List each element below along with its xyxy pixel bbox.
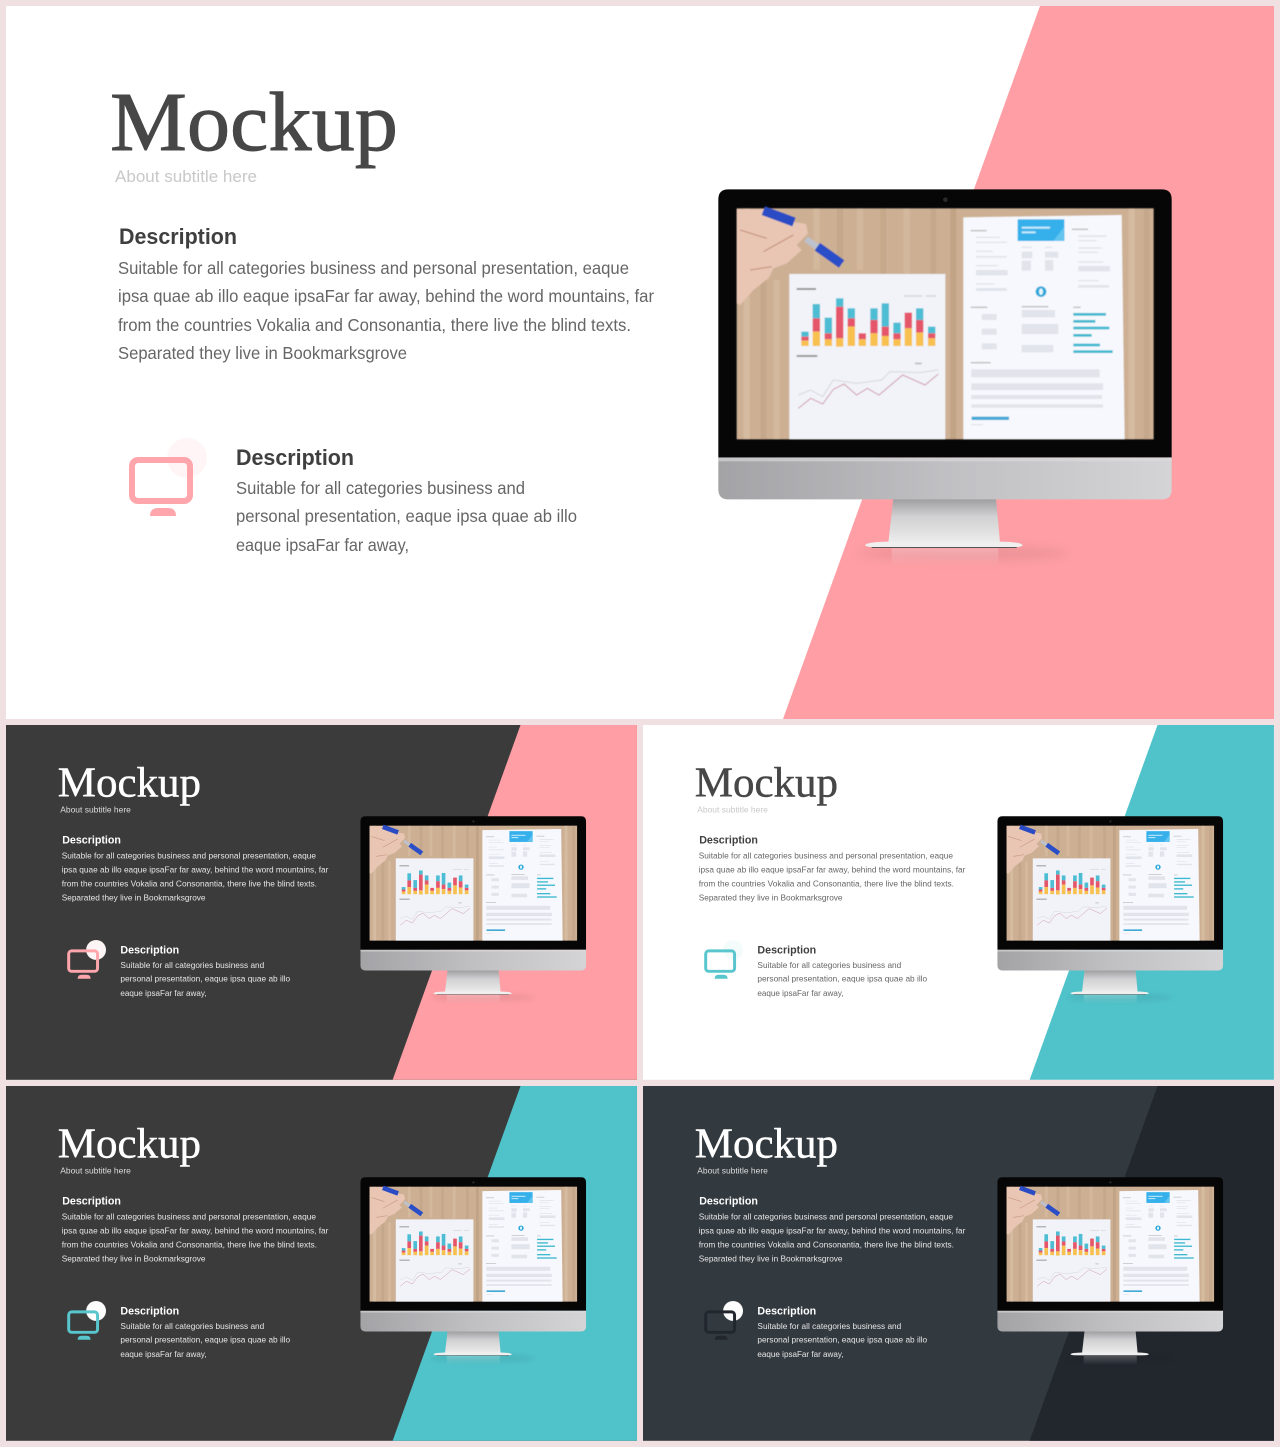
text block: description — [118, 224, 654, 363]
text block: feature description: Suitable for all categories business and — [757, 1321, 901, 1331]
icon: monitor — [69, 940, 106, 979]
monitor mockup — [360, 816, 586, 1004]
text block: description: ipsa quae ab illo eaque ipsaFar far away, behind the word mountains, far — [699, 864, 966, 874]
subtitle: About subtitle here — [697, 805, 768, 815]
monitor mockup — [997, 816, 1223, 1004]
text block: description: Description — [62, 834, 121, 846]
text block: description — [62, 1195, 329, 1264]
text block: description: Suitable for all categories business and personal presentation, eaque — [62, 850, 316, 860]
text block: description: ipsa quae ab illo eaque ipsaFar far away, behind the word mountains, far — [62, 1225, 329, 1235]
panel: dark and teal slide — [6, 1086, 637, 1441]
text block: feature description: Description — [120, 944, 179, 956]
text block: description: from the countries Vokalia and Consonantia, there live the blind texts. — [62, 1240, 317, 1250]
text block: description: from the countries Vokalia and Consonantia, there live the blind texts. — [118, 315, 631, 335]
text block: feature description: eaque ipsaFar far away, — [236, 535, 409, 555]
text block: feature description — [120, 1305, 290, 1359]
text block: description: ipsa quae ab illo eaque ipsaFar far away, behind the word mountains, far — [699, 1225, 966, 1235]
text block: description: Suitable for all categories business and personal presentation, eaque — [699, 1211, 953, 1221]
text block: feature description: eaque ipsaFar far away, — [120, 1349, 207, 1359]
text block: feature description: Description — [120, 1305, 179, 1317]
panel: main white and pink slide — [6, 6, 1274, 719]
text block: feature description — [757, 944, 927, 998]
text block: description: ipsa quae ab illo eaque ipsaFar far away, behind the word mountains, far — [118, 286, 654, 306]
title: Mockup — [695, 761, 838, 807]
text block: description — [62, 834, 329, 903]
text block: feature description: personal presentation, eaque ipsa quae ab illo — [120, 1335, 290, 1345]
text block: description: Description — [119, 224, 237, 249]
text block: feature description: Suitable for all categories business and — [236, 478, 525, 498]
text block: description — [699, 834, 966, 903]
subtitle: About subtitle here — [115, 167, 257, 186]
text block: description: from the countries Vokalia and Consonantia, there live the blind texts. — [699, 1240, 954, 1250]
subtitle: About subtitle here — [60, 1166, 131, 1176]
text block: feature description: Suitable for all categories business and — [120, 1321, 264, 1331]
text block: description: from the countries Vokalia and Consonantia, there live the blind texts. — [62, 879, 317, 889]
text block: feature description — [757, 1305, 927, 1359]
text block: feature description: Description — [757, 944, 816, 956]
text block: description — [699, 1195, 966, 1264]
text block: feature description: eaque ipsaFar far away, — [120, 988, 207, 998]
panel: navy slide — [643, 1086, 1274, 1441]
icon: monitor — [132, 438, 207, 516]
monitor mockup — [997, 1177, 1223, 1365]
text block: feature description: personal presentation, eaque ipsa quae ab illo — [120, 974, 290, 984]
title: Mockup — [695, 1122, 838, 1168]
monitor mockup — [360, 1177, 586, 1365]
text block: description: Suitable for all categories business and personal presentation, eaque — [62, 1211, 316, 1221]
text block: feature description: personal presentation, eaque ipsa quae ab illo — [757, 1335, 927, 1345]
text block: description: ipsa quae ab illo eaque ipsaFar far away, behind the word mountains, far — [62, 864, 329, 874]
text block: feature description: personal presentation, eaque ipsa quae ab illo — [757, 974, 927, 984]
text block: description: Suitable for all categories business and personal presentation, eaque — [118, 258, 629, 278]
title: Mockup — [110, 76, 398, 169]
text block: feature description: eaque ipsaFar far away, — [757, 988, 844, 998]
text block: description: Separated they live in Bookmarksgrove — [62, 1254, 206, 1264]
text block: description: from the countries Vokalia and Consonantia, there live the blind texts. — [699, 879, 954, 889]
text block: feature description: Suitable for all categories business and — [120, 960, 264, 970]
icon: monitor — [69, 1301, 106, 1340]
text block: description: Separated they live in Bookmarksgrove — [699, 893, 843, 903]
panel: white and teal slide — [643, 725, 1274, 1080]
text block: description: Separated they live in Bookmarksgrove — [699, 1254, 843, 1264]
subtitle: About subtitle here — [60, 805, 131, 815]
title: Mockup — [58, 1122, 201, 1168]
icon: monitor — [706, 1301, 743, 1340]
text block: description: Suitable for all categories business and personal presentation, eaque — [699, 850, 953, 860]
text block: description: Description — [699, 834, 758, 846]
text block: feature description: Suitable for all categories business and — [757, 960, 901, 970]
text block: description: Separated they live in Bookmarksgrove — [62, 893, 206, 903]
icon: monitor — [706, 940, 743, 979]
text block: description: Description — [699, 1195, 758, 1207]
text block: description: Description — [62, 1195, 121, 1207]
text block: feature description: Description — [757, 1305, 816, 1317]
panel: dark and pink slide — [6, 725, 637, 1080]
text block: feature description: eaque ipsaFar far away, — [757, 1349, 844, 1359]
text block: feature description — [236, 445, 577, 555]
title: Mockup — [58, 761, 201, 807]
subtitle: About subtitle here — [697, 1166, 768, 1176]
monitor mockup — [718, 189, 1172, 567]
text block: feature description: personal presentation, eaque ipsa quae ab illo — [236, 506, 577, 526]
text block: description: Separated they live in Bookmarksgrove — [118, 343, 407, 363]
text block: feature description — [120, 944, 290, 998]
text block: feature description: Description — [236, 445, 354, 470]
